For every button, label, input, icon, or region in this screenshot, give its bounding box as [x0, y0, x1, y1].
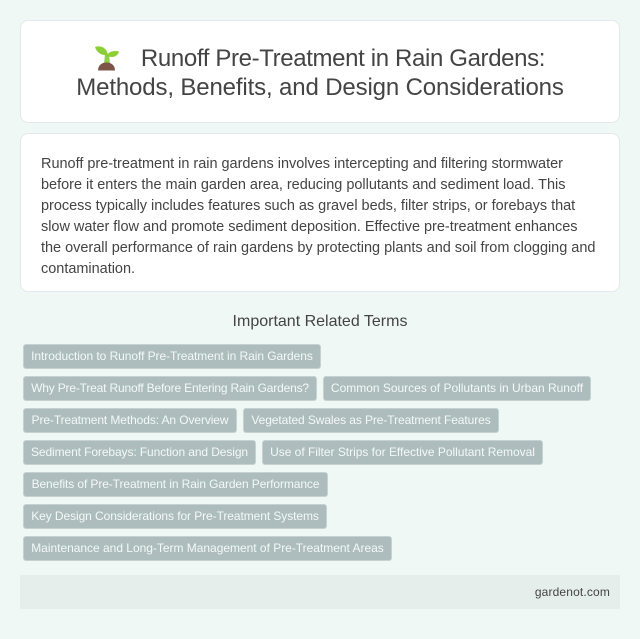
tag: design considerations	[23, 504, 327, 529]
tag: maintenance: Maintenance and Long-Term Management of Pre-Treatment Areas	[31, 541, 384, 555]
title: Methods, Benefits, and Design Considerations	[76, 74, 564, 101]
tag: sediment forebays	[23, 440, 256, 465]
title	[76, 45, 564, 101]
header panel	[20, 20, 620, 123]
tag: benefits: Benefits of Pre-Treatment in Rain Garden Performance	[32, 477, 319, 491]
tag: filter strips	[262, 440, 543, 465]
title: Runoff Pre-Treatment in Rain Gardens:	[141, 45, 545, 72]
tag: sediment forebays: Sediment Forebays: Function and Design	[31, 445, 248, 459]
summary text: contamination.	[41, 261, 135, 277]
tag: filter strips: Use of Filter Strips for Effective Pollutant Removal	[270, 445, 535, 459]
summary text: Runoff pre-treatment in rain gardens involves intercepting and filtering stormwater	[41, 156, 563, 172]
tag: pollutant sources	[323, 376, 591, 401]
tag: why pre-treat: Why Pre-Treat Runoff Before Entering Rain Gardens?	[31, 381, 309, 395]
footer bar	[20, 575, 620, 609]
footer source: gardenot.com	[535, 585, 610, 599]
related terms tags	[23, 344, 591, 561]
summary text: before it enters the main garden area, reducing pollutants and sediment load. This	[41, 177, 565, 193]
summary text: slow water flow and promote sediment deposition. Effective pre-treatment enhances	[41, 219, 578, 235]
summary text: the overall performance of rain gardens by protecting plants and soil from clogging and	[41, 240, 595, 256]
tag: methods overview: Pre-Treatment Methods: An Overview	[32, 413, 228, 427]
icon: seedling	[95, 46, 119, 70]
tag: why pre-treat	[23, 376, 317, 401]
summary panel	[20, 133, 620, 292]
tag: maintenance	[23, 536, 392, 561]
tag: introduction	[23, 344, 321, 369]
tag: introduction: Introduction to Runoff Pre-Treatment in Rain Gardens	[31, 349, 313, 363]
related terms heading: Important Related Terms	[233, 313, 407, 330]
summary text: process typically includes features such as gravel beds, filter strips, or forebays that	[41, 198, 575, 214]
tag: methods overview	[23, 408, 237, 433]
tag: vegetated swales: Vegetated Swales as Pre-Treatment Features	[251, 413, 491, 427]
tag: vegetated swales	[243, 408, 499, 433]
summary text	[41, 156, 595, 277]
tag: benefits	[23, 472, 328, 497]
tag: pollutant sources: Common Sources of Pollutants in Urban Runoff	[331, 381, 583, 395]
tag: design considerations: Key Design Considerations for Pre-Treatment Systems	[31, 509, 319, 523]
